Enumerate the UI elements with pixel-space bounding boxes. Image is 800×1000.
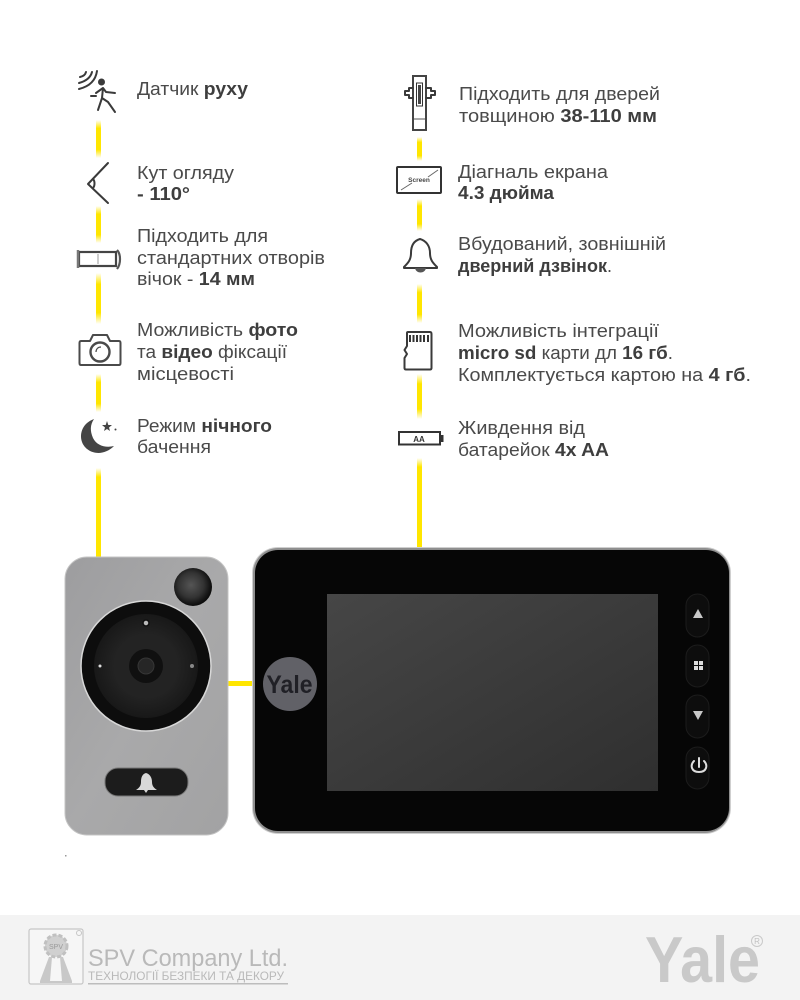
Yale badge <box>263 657 317 711</box>
SPV tagline: ТЕХНОЛОГІЇ БЕЗПЕКИ ТА ДЕКОРУ <box>88 969 284 983</box>
icon: bell <box>404 239 437 272</box>
yellow connector between camera and monitor <box>226 681 254 686</box>
outdoor camera unit <box>65 557 228 835</box>
text: door bell: дверний дзвінок. <box>458 256 612 276</box>
text: night vision <box>137 416 272 457</box>
text: micro sd <box>458 321 751 385</box>
SPV emblem: SPV <box>49 944 63 951</box>
SPV Company logo <box>29 929 288 984</box>
text: batteries: батарейок 4x AA <box>458 440 609 460</box>
icon: screen diagonal <box>397 167 441 193</box>
text: night vision: Режим нічного <box>137 416 272 436</box>
monitor screen <box>327 594 658 791</box>
text: standard peephole holes <box>137 226 325 289</box>
text: door thickness: Підходить для дверей <box>459 84 660 104</box>
text: door thickness <box>459 84 660 126</box>
icon: motion sensor <box>79 71 115 112</box>
icon: AA battery <box>399 432 444 444</box>
icon: moon and star <box>81 419 116 453</box>
Yale logo: R <box>754 937 760 946</box>
text: standard peephole holes: Підходить для <box>137 226 268 246</box>
text: batteries <box>458 418 609 460</box>
text: photo and video: місцевості <box>137 364 234 384</box>
camera lens <box>81 601 211 731</box>
text: door bell <box>458 234 666 276</box>
text: screen diagonal: Діагналь екрана <box>458 162 609 182</box>
text: photo and video: та відео фіксації <box>137 342 287 362</box>
text: door bell: Вбудований, зовнішній <box>458 234 666 254</box>
text: standard peephole holes: стандартних отворів <box>137 248 325 268</box>
indoor monitor <box>252 547 731 834</box>
button: power <box>686 747 709 789</box>
text: photo and video <box>137 320 298 384</box>
Yale logo: Yale <box>645 923 760 996</box>
Yale badge: Yale <box>266 671 313 699</box>
icon: viewing angle <box>88 163 108 203</box>
text: viewing angle <box>137 163 234 204</box>
bell button <box>105 768 188 796</box>
text: viewing angle: - 110° <box>137 184 190 204</box>
text: micro sd: Можливість інтеграції <box>458 321 659 341</box>
text: batteries: Живдення від <box>458 418 586 438</box>
text: screen diagonal: 4.3 дюйма <box>458 183 555 203</box>
button: down <box>686 695 709 738</box>
icon: peephole <box>78 250 120 269</box>
text: door thickness: товщиною 38-110 мм <box>459 106 657 126</box>
text: viewing angle: Кут огляду <box>137 163 234 183</box>
icon: door thickness <box>405 76 435 130</box>
text: standard peephole holes: вічок - 14 мм <box>137 269 255 289</box>
SPV emblem <box>29 929 83 984</box>
footer band <box>0 915 800 1000</box>
icon: micro sd card <box>404 332 432 370</box>
button: up <box>686 594 709 637</box>
yellow connector lines: left column <box>96 120 101 558</box>
icon: camera <box>80 335 120 365</box>
text: night vision: бачення <box>137 437 211 457</box>
button: menu <box>686 645 709 687</box>
text: motion sensor: Датчик руху <box>137 79 248 99</box>
icon: screen diagonal: Screen <box>408 177 430 184</box>
yellow connector lines: right column <box>417 137 422 548</box>
text: micro sd: micro sd карти дл 16 гб. <box>458 343 673 363</box>
text: micro sd: Комплектується картою на 4 гб. <box>458 365 751 385</box>
SPV Company name: SPV Company Ltd. <box>88 945 288 972</box>
text: screen diagonal <box>458 162 609 203</box>
icon: AA battery: AA <box>413 435 425 444</box>
motion sensor dome <box>174 568 212 606</box>
text: photo and video: Можливість фото <box>137 320 298 340</box>
